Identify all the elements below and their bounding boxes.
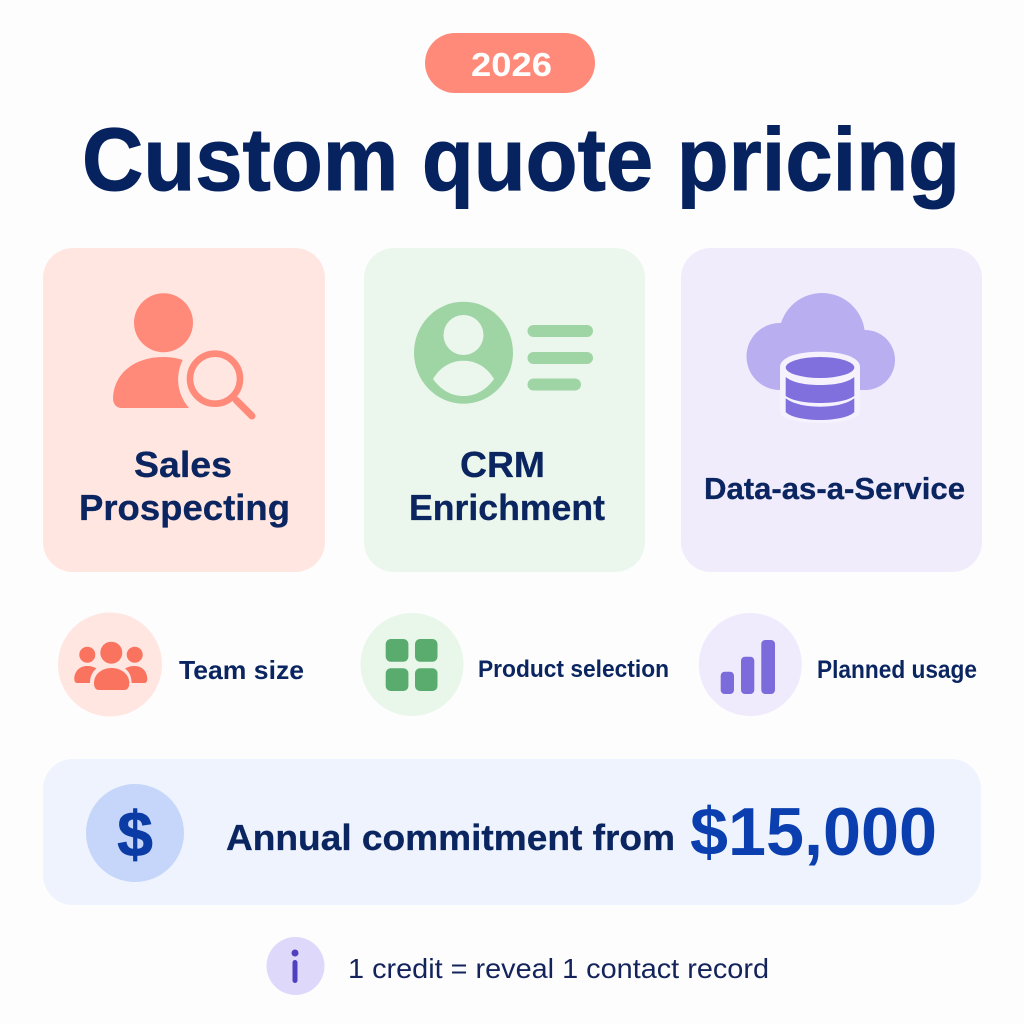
icon: dollar: $ [117, 798, 153, 870]
label: planned usage: Planned usage [817, 656, 977, 684]
factor: planned usage [699, 613, 977, 716]
title: Custom quote pricing [82, 109, 960, 209]
heading: crm enrichment: CRM [460, 444, 545, 485]
icon: product grid [386, 639, 438, 691]
year badge [425, 33, 595, 93]
text: credit note: 1 credit = reveal 1 contact record [348, 953, 769, 984]
panel: data-as-a-service [681, 248, 982, 572]
note: credit definition [266, 937, 769, 995]
icon: dollar [86, 784, 184, 882]
icon: team [74, 642, 147, 690]
price: $15,000 [690, 794, 937, 870]
icon: cloud database [746, 293, 895, 423]
heading: sales prospecting [79, 444, 290, 528]
heading: data-as-a-service: Data-as-a-Service [704, 471, 965, 506]
panel: crm enrichment [364, 248, 645, 572]
heading: crm enrichment [409, 444, 605, 528]
panel: sales prospecting [43, 248, 325, 572]
label: team size: Team size [179, 655, 304, 685]
panel: annual commitment [43, 759, 981, 905]
heading: sales prospecting: Sales [134, 444, 232, 485]
heading: crm enrichment: Enrichment [409, 487, 605, 528]
heading: sales prospecting: Prospecting [79, 487, 290, 528]
icon: person with magnifier [113, 293, 252, 416]
text: annual commitment: Annual commitment from [226, 817, 675, 858]
year badge: 2026 [471, 46, 552, 83]
label: product selection: Product selection [478, 656, 669, 683]
icon: info [266, 937, 324, 995]
factor: team size [58, 612, 304, 716]
factor: product selection [360, 613, 669, 716]
icon: contact card [414, 302, 593, 404]
icon: usage bars [721, 640, 775, 694]
